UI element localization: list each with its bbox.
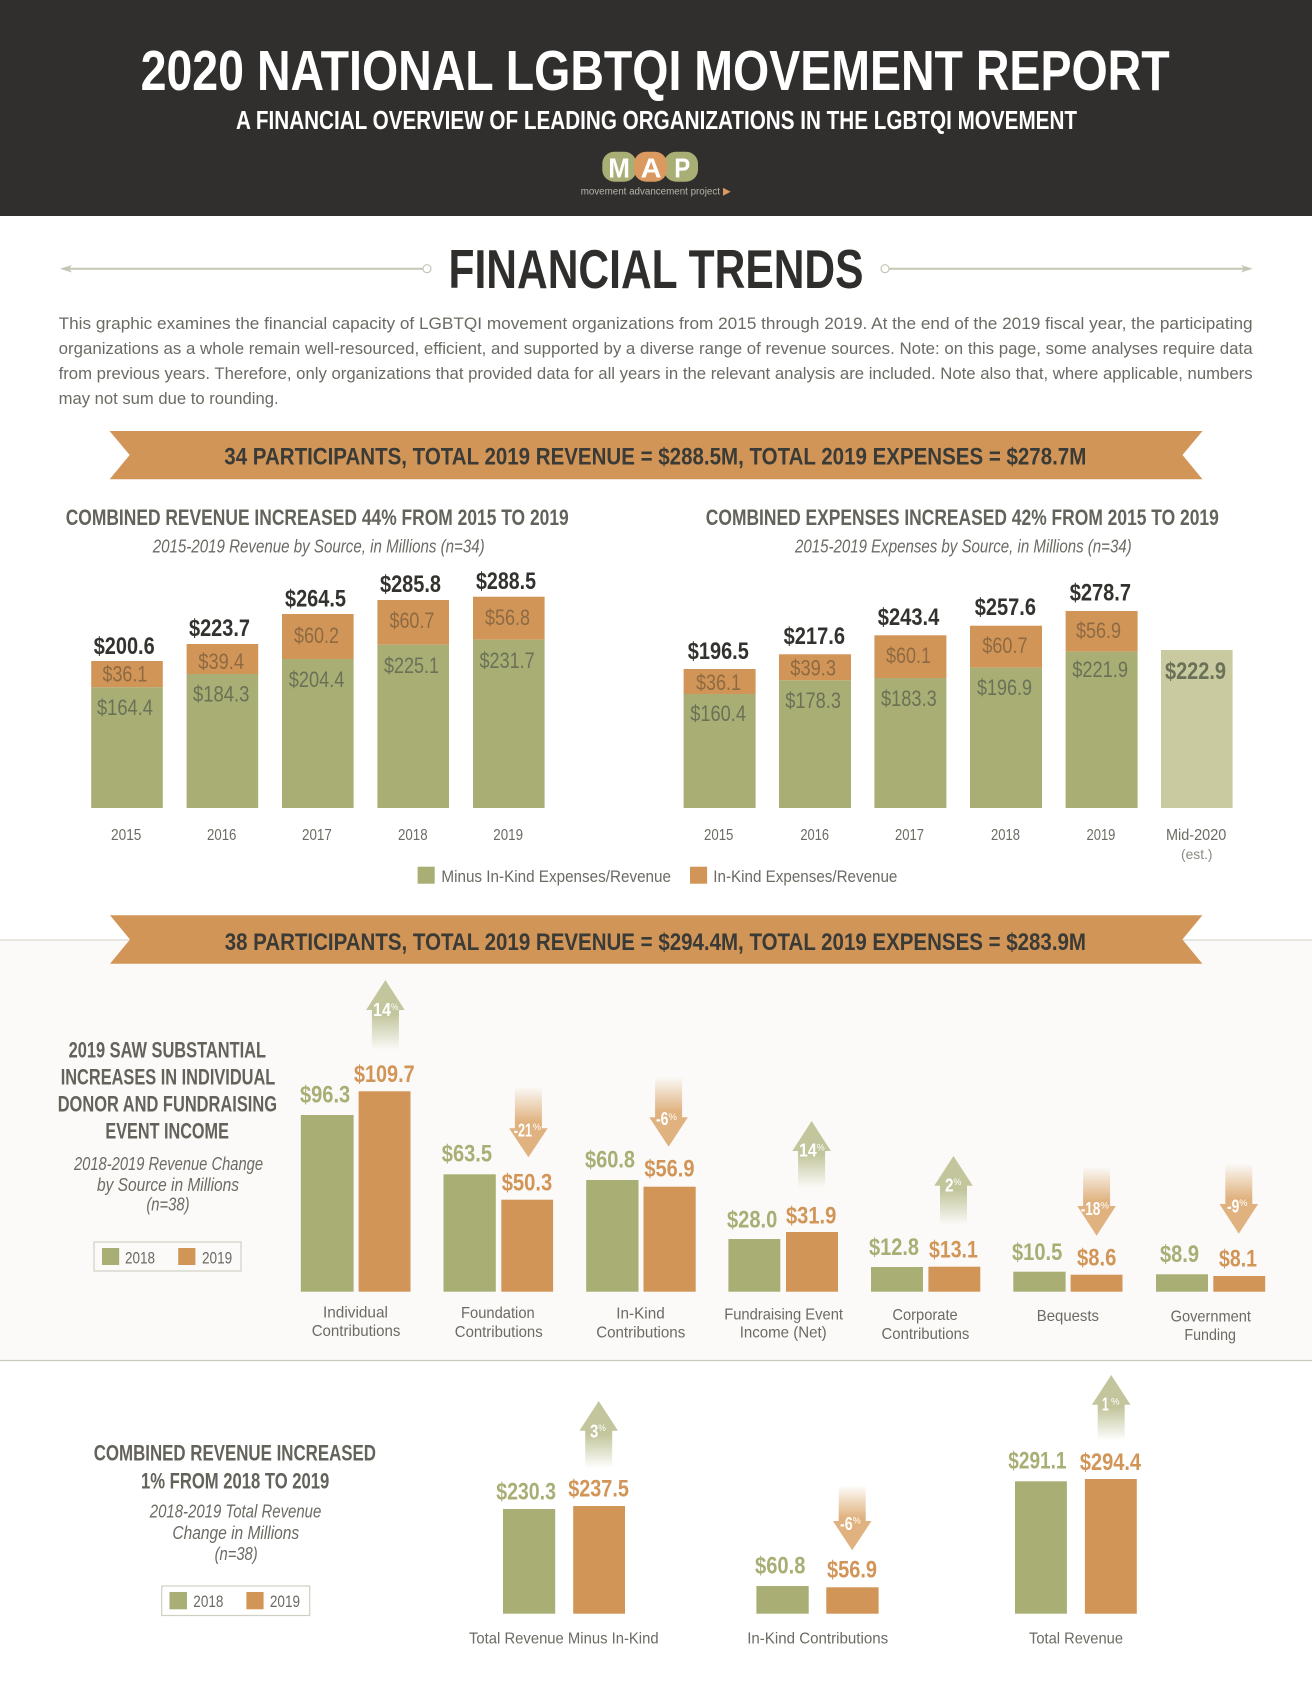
intro paragraph: from previous years. Therefore, only organizations that provided data for all years in the relevant analysis are included. Note also that, where applicable, numbers <box>59 364 1253 383</box>
arrow: up 3%: % <box>598 1423 606 1434</box>
bar: revenue 2016: $184.3 <box>193 682 249 707</box>
chart: government funding <box>1156 1241 1265 1344</box>
text block: combined revenue: Change in Millions <box>172 1523 299 1543</box>
bar: revenue 2018: $60.7 <box>390 608 434 633</box>
logo: MAP: A <box>641 152 662 183</box>
bar: expenses mid-2020 estimate <box>1161 650 1233 862</box>
legend: 2018 and 2019 <box>94 1242 241 1271</box>
chart: in-kind contributions: Contributions <box>596 1325 685 1342</box>
bar: expenses 2019 <box>1066 580 1138 844</box>
banner: 34 participants: 34 PARTICIPANTS, TOTAL 2019 REVENUE = $288.5M, TOTAL 2019 EXPENSES = $278.7M <box>224 444 1086 470</box>
bar: expenses 2019: $278.7 <box>1070 580 1131 607</box>
arrow: up 1%: 1 <box>1102 1395 1109 1415</box>
legend: 2018 and 2019 bottom <box>162 1586 310 1616</box>
bar: revenue 2019 <box>473 568 545 844</box>
arrow: down 6%: -6 <box>656 1109 668 1129</box>
chart: fundraising event income <box>724 1202 844 1342</box>
text block: revenue by source: INCREASES IN INDIVIDUAL <box>61 1064 275 1089</box>
text block: revenue by source: EVENT INCOME <box>105 1119 229 1144</box>
bar: expenses mid-2020 estimate: Mid-2020 <box>1166 827 1226 844</box>
heading: financial trends: FINANCIAL TRENDS <box>448 239 864 300</box>
bar: expenses 2017: $60.1 <box>886 643 931 668</box>
arrow: down 21% <box>509 1087 548 1157</box>
arrow: down 18%: -18 <box>1081 1199 1100 1219</box>
legend: 2018 and 2019: 2018 <box>125 1248 155 1267</box>
bar: revenue 2017: 2017 <box>302 827 332 844</box>
bar: revenue 2017: $60.2 <box>294 623 339 648</box>
chart: bequests: $10.5 <box>1012 1239 1062 1266</box>
arrow: down 9% <box>1220 1163 1258 1234</box>
chart: foundation contributions: $50.3 <box>502 1170 552 1197</box>
chart: bequests: $8.6 <box>1077 1245 1116 1272</box>
arrow: up 1% <box>1092 1375 1130 1441</box>
chart: government funding: Funding <box>1184 1327 1236 1344</box>
bar: expenses 2016: $39.3 <box>790 656 836 681</box>
arrow: down 6% bottom: -6 <box>840 1514 853 1534</box>
chart: in-kind contributions total: In-Kind Contributions <box>747 1631 888 1648</box>
arrow: down 9%: % <box>1239 1198 1248 1209</box>
arrow: down 6% <box>649 1077 688 1147</box>
arrow: up 2% <box>934 1156 973 1225</box>
bar: revenue 2016 <box>187 615 258 844</box>
bar: expenses 2016: $217.6 <box>784 623 845 650</box>
chart: corporate contributions <box>869 1234 980 1343</box>
bar: expenses 2017: $243.4 <box>878 604 940 631</box>
bar: expenses 2019: 2019 <box>1086 827 1115 844</box>
subheading: revenue: 2015-2019 Revenue by Source, in Millions (n=34) <box>152 536 485 556</box>
arrow: up 14%: 14 <box>373 1000 391 1020</box>
arrow: up 3%: 3 <box>590 1421 598 1441</box>
bar: revenue 2015: $36.1 <box>102 662 147 687</box>
chart: corporate contributions: $13.1 <box>929 1236 978 1263</box>
panel: header <box>0 0 1312 216</box>
bar: expenses 2016 <box>779 623 851 844</box>
arrow: up 14%: % <box>391 1002 399 1013</box>
chart: total revenue minus in-kind: $237.5 <box>568 1476 629 1503</box>
panel: source band background <box>0 940 1312 1360</box>
bar: expenses mid-2020 estimate: (est.) <box>1181 846 1212 862</box>
text block: combined revenue: COMBINED REVENUE INCREASED <box>94 1441 376 1466</box>
logo: MAP: M <box>608 152 630 183</box>
legend: 2018 and 2019 bottom: 2018 <box>193 1592 223 1611</box>
chart: individual contributions: Contributions <box>312 1323 400 1340</box>
arrow: down 21%: -21 <box>514 1121 532 1141</box>
legend: revenue and expenses: Minus In-Kind Expenses/Revenue <box>441 867 671 886</box>
chart: government funding: $8.1 <box>1219 1246 1257 1273</box>
arrow: up 3% <box>579 1401 618 1468</box>
bar: revenue 2018: 2018 <box>398 827 428 844</box>
bar: revenue 2019: $288.5 <box>476 568 536 595</box>
bar: revenue 2015: $164.4 <box>97 695 153 720</box>
chart: in-kind contributions total <box>747 1552 888 1648</box>
bar: expenses 2018: 2018 <box>991 827 1020 844</box>
text block: combined revenue: (n=38) <box>215 1544 258 1564</box>
bar: expenses 2016: $178.3 <box>785 688 841 713</box>
bar: expenses 2017: $183.3 <box>881 686 937 711</box>
chart: government funding: Government <box>1171 1309 1251 1326</box>
text block: combined revenue: 1% FROM 2018 TO 2019 <box>141 1468 329 1493</box>
banner: 34 participants <box>110 431 1203 479</box>
chart: foundation contributions: Foundation <box>461 1305 535 1322</box>
intro paragraph: This graphic examines the financial capacity of LGBTQI movement organizations from 2015 through 2019. At the end of the 2019 fiscal year, the participating <box>59 314 1253 333</box>
subtitle: A FINANCIAL OVERVIEW OF LEADING ORGANIZATIONS IN THE LGBTQI MOVEMENT <box>236 107 1077 135</box>
arrow: up 14% fundraising <box>792 1121 831 1188</box>
banner: 38 participants <box>110 915 1202 964</box>
arrow: up 14% fundraising: % <box>817 1143 825 1154</box>
legend: 2018 and 2019: 2019 <box>202 1248 232 1267</box>
legend: revenue and expenses: In-Kind Expenses/Revenue <box>713 867 897 886</box>
bar: expenses 2018: $257.6 <box>975 594 1036 621</box>
bar: revenue 2015: 2015 <box>111 827 141 844</box>
intro paragraph: may not sum due to rounding. <box>59 389 279 408</box>
chart: in-kind contributions: In-Kind <box>616 1306 665 1323</box>
text block: combined revenue <box>94 1441 376 1564</box>
legend: 2018 and 2019 bottom: 2019 <box>270 1592 300 1611</box>
bar: expenses 2018: $60.7 <box>982 633 1028 658</box>
chart: total revenue: $294.4 <box>1080 1449 1142 1476</box>
text block: revenue by source: 2019 SAW SUBSTANTIAL <box>69 1038 266 1063</box>
text block: revenue by source: 2018-2019 Revenue Change <box>73 1154 263 1174</box>
bar: expenses 2015: $160.4 <box>690 701 746 726</box>
arrow: up 14% fundraising: 14 <box>799 1141 817 1161</box>
chart: fundraising event income: $31.9 <box>786 1202 836 1229</box>
chart: in-kind contributions <box>585 1146 696 1342</box>
chart: total revenue minus in-kind: $230.3 <box>496 1478 556 1505</box>
banner: 38 participants: 38 PARTICIPANTS, TOTAL 2019 REVENUE = $294.4M, TOTAL 2019 EXPENSES = $283.9M <box>225 929 1086 956</box>
bar: revenue 2018: $225.1 <box>384 653 439 678</box>
chart: in-kind contributions total: $60.8 <box>755 1552 805 1579</box>
chart: corporate contributions: Corporate <box>892 1307 958 1324</box>
logo: MAP: movement advancement project <box>581 186 720 197</box>
bar: revenue 2017: $264.5 <box>285 586 346 613</box>
chart: individual contributions: $96.3 <box>300 1082 350 1109</box>
heading: revenue: COMBINED REVENUE INCREASED 44% FROM 2015 TO 2019 <box>66 505 569 530</box>
chart: total revenue: Total Revenue <box>1029 1631 1123 1648</box>
chart: in-kind contributions total: $56.9 <box>827 1556 877 1583</box>
bar: revenue 2016: 2016 <box>207 827 236 844</box>
chart: individual contributions <box>300 1061 415 1340</box>
bar: expenses 2017: 2017 <box>895 827 924 844</box>
chart: individual contributions: $109.7 <box>354 1061 415 1088</box>
bar: revenue 2017: $204.4 <box>289 667 344 692</box>
subheading: expenses: 2015-2019 Expenses by Source, in Millions (n=34) <box>794 536 1132 556</box>
text block: revenue by source: DONOR AND FUNDRAISING <box>58 1092 277 1117</box>
bar: expenses 2019: $221.9 <box>1072 657 1128 682</box>
bar: expenses 2015: $196.5 <box>688 638 749 665</box>
bar: expenses 2015: $36.1 <box>696 670 741 695</box>
text block: revenue by source: (n=38) <box>146 1195 190 1215</box>
intro paragraph: organizations as a whole remain well-resourced, efficient, and supported by a diverse range of revenue sources. Note: on this page, some analyses require data <box>59 339 1253 358</box>
chart: foundation contributions: $63.5 <box>442 1141 492 1168</box>
arrow: down 6% bottom: % <box>853 1515 861 1526</box>
bar: revenue 2016: $39.4 <box>198 649 244 674</box>
arrow: down 21%: % <box>533 1122 542 1133</box>
bar: expenses 2015 <box>684 638 756 844</box>
heading: financial trends <box>60 239 1253 300</box>
chart: fundraising event income: Fundraising Event <box>724 1306 844 1323</box>
chart: fundraising event income: $28.0 <box>727 1206 777 1233</box>
bar: revenue 2015: $200.6 <box>94 633 155 660</box>
bar: revenue 2019: $56.8 <box>485 605 530 630</box>
text block: revenue by source <box>58 1038 277 1215</box>
chart: in-kind contributions: $56.9 <box>644 1156 694 1183</box>
bar: revenue 2016: $223.7 <box>189 615 250 642</box>
bar: revenue 2018 <box>377 571 449 844</box>
bar: revenue 2015 <box>91 633 163 844</box>
arrow: up 14% <box>366 980 405 1050</box>
text block: combined revenue: 2018-2019 Total Revenue <box>149 1502 321 1522</box>
text block: revenue by source: by Source in Millions <box>97 1175 239 1195</box>
chart: corporate contributions: $12.8 <box>869 1234 919 1261</box>
bar: expenses mid-2020 estimate: $222.9 <box>1165 658 1226 685</box>
arrow: down 6% bottom <box>833 1485 872 1550</box>
chart: foundation contributions <box>442 1141 553 1341</box>
bar: expenses 2017 <box>874 604 946 844</box>
chart: foundation contributions: Contributions <box>455 1324 543 1341</box>
chart: in-kind contributions: $60.8 <box>585 1146 635 1173</box>
bar: expenses 2018: $196.9 <box>977 675 1032 700</box>
chart: total revenue minus in-kind: Total Revenue Minus In-Kind <box>469 1631 659 1648</box>
bar: expenses 2015: 2015 <box>704 827 733 844</box>
arrow: up 2%: % <box>954 1177 962 1188</box>
chart: bequests <box>1012 1239 1122 1325</box>
intro paragraph <box>59 314 1253 408</box>
arrow: up 1%: % <box>1111 1396 1120 1407</box>
logo: MAP: P <box>674 152 690 183</box>
arrow: up 2%: 2 <box>945 1176 954 1196</box>
chart: bequests: Bequests <box>1037 1308 1099 1325</box>
chart: corporate contributions: Contributions <box>882 1326 969 1343</box>
chart: fundraising event income: Income (Net) <box>740 1325 827 1342</box>
legend: revenue and expenses <box>418 867 897 886</box>
bar: revenue 2019: 2019 <box>493 827 523 844</box>
chart: total revenue minus in-kind <box>469 1476 659 1648</box>
chart: total revenue: $291.1 <box>1008 1448 1066 1475</box>
arrow: down 18%: % <box>1100 1200 1110 1211</box>
arrow: down 18% <box>1077 1167 1116 1236</box>
logo: MAP <box>581 152 731 197</box>
bar: expenses 2018 <box>970 594 1042 844</box>
arrow: down 9%: -9 <box>1227 1196 1239 1216</box>
bar: expenses 2019: $56.9 <box>1076 618 1121 643</box>
bar: expenses 2016: 2016 <box>800 827 829 844</box>
arrow: down 6%: % <box>668 1112 678 1123</box>
chart: total revenue <box>1008 1448 1142 1648</box>
chart: individual contributions: Individual <box>323 1304 388 1321</box>
bar: revenue 2018: $285.8 <box>380 571 441 598</box>
bar: revenue 2019: $231.7 <box>480 648 535 673</box>
panel: expenses chart <box>684 505 1233 862</box>
bar: revenue 2017 <box>282 586 354 844</box>
panel: revenue chart <box>66 505 569 844</box>
chart: government funding: $8.9 <box>1160 1241 1199 1268</box>
